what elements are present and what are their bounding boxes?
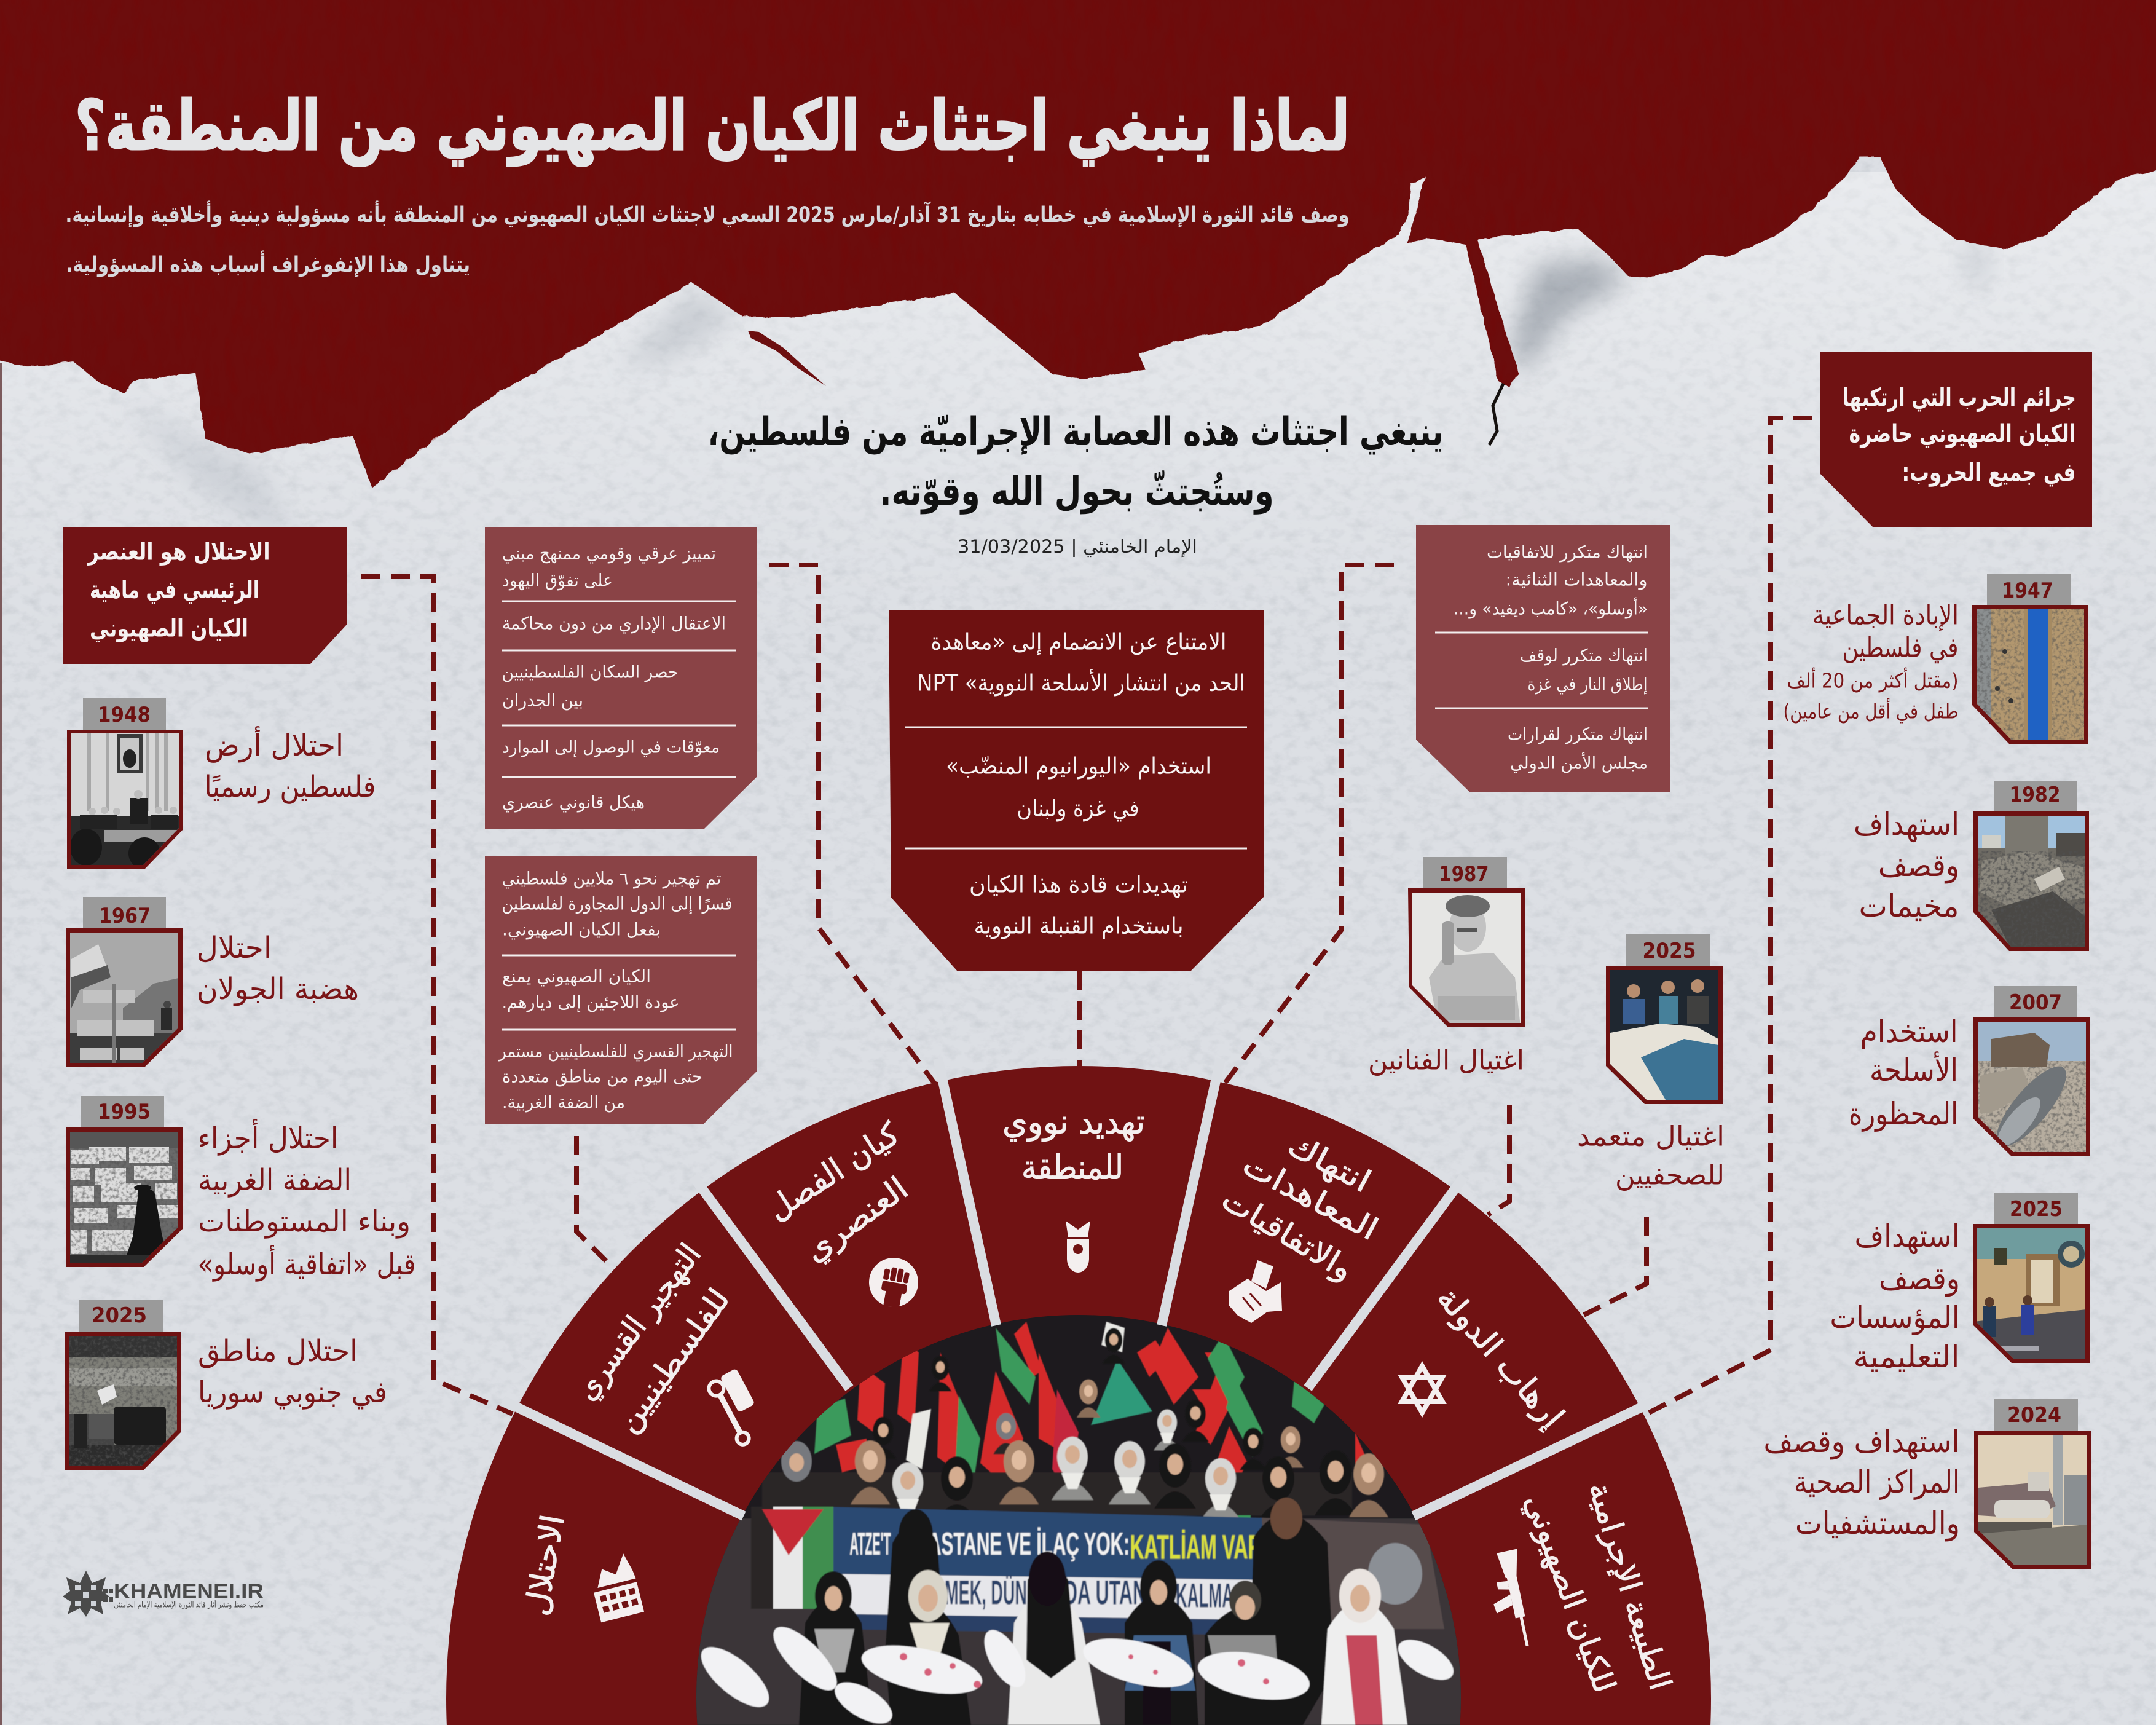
- timeline item 1948: [67, 698, 376, 872]
- torn red header paper: [0, 0, 2156, 492]
- wedge: criminal nature: للكيان الصهيوني: [1517, 1490, 1623, 1698]
- intro text line 2: يتناول هذا الإنفوغراف أسباب هذه المسؤولية.: [66, 250, 470, 277]
- wedge: treaty violations: انتهاك: [1281, 1127, 1377, 1200]
- panel: apartheid entity details: حصر السكان الفلسطينيين: [502, 661, 679, 682]
- wedge: nuclear threat: للمنطقة: [1021, 1148, 1123, 1186]
- white shrouded bundles: [692, 1618, 1460, 1725]
- war crimes item 2025 schools: 2025: [2010, 1197, 2063, 1222]
- war crimes item 1982: مخيمات: [1859, 888, 1959, 924]
- war crimes item 1982: 1982: [2010, 783, 2060, 807]
- war crimes item 2024 hospitals: والمستشفيات: [1795, 1506, 1960, 1542]
- timeline item 1967: [66, 897, 359, 1070]
- war crimes item 2025 schools: [1830, 1193, 2090, 1375]
- photo: protest crowd: [692, 1309, 1463, 1725]
- panel: treaty violations details: انتهاك متكرر لوقف: [1520, 645, 1648, 665]
- panel: treaty violations details: «أوسلو»، «كامب ديفيد» و...: [1454, 596, 1648, 618]
- wedge: forced displacement: للفلسطينيين: [609, 1282, 737, 1439]
- timeline item 1967: 1967: [99, 904, 151, 928]
- intro text line 1: وصف قائد الثورة الإسلامية في خطابه بتاريخ 31 آذار/مارس 2025 السعي لاجتثاث الكيان الصهيوني من المنطقة بأنه مسؤولية دينية وأخلاقية وإنسانية.: [65, 200, 1350, 227]
- panel: treaty violations details: [1416, 525, 1670, 792]
- left header: occupation: [63, 527, 347, 664]
- wedge: occupation: [518, 1512, 644, 1622]
- wedge divider lines: [503, 1059, 1656, 1516]
- wedge: apartheid entity: كيان الفصل: [761, 1116, 906, 1228]
- icon: star of David: [1402, 1366, 1442, 1413]
- war crimes item 1982: وقصف: [1878, 848, 1959, 884]
- panel: nuclear threat details: [889, 610, 1264, 971]
- left header: occupation: الاحتلال هو العنصر: [87, 539, 270, 566]
- war crimes item 2024 hospitals: [1764, 1399, 2091, 1570]
- logo: Khamenei.ir: [63, 1571, 264, 1617]
- war crimes item 1982: استهداف: [1854, 807, 1959, 843]
- wedge: state terrorism: إرهاب الدولة: [1430, 1280, 1571, 1435]
- icon: key and bundle: [706, 1368, 769, 1447]
- panel: nuclear threat details: الامتناع عن الانضمام إلى «معاهدة: [930, 628, 1227, 655]
- Palestinian flag: [751, 1507, 833, 1609]
- panel: forced displacement details: حتى اليوم من مناطق متعددة: [502, 1066, 702, 1087]
- timeline item 1967: هضبة الجولان: [197, 972, 359, 1006]
- panel: apartheid entity details: هيكل قانوني عنصري: [502, 792, 645, 813]
- right header: war crimes: [1820, 352, 2092, 527]
- central quote heading: [708, 409, 1443, 515]
- panel: forced displacement details: بفعل الكيان الصهيوني.: [502, 920, 661, 939]
- icon: occupied buildings: [586, 1552, 644, 1622]
- war crimes item 2007: الأسلحة: [1870, 1051, 1958, 1088]
- left header: occupation: الكيان الصهيوني: [90, 615, 248, 643]
- panel: apartheid entity details: معوّقات في الوصول إلى الموارد: [502, 736, 720, 757]
- timeline item 1948: 1948: [98, 703, 151, 727]
- item 1987 artists: [1368, 857, 1525, 1076]
- logo: Khamenei.ir: مكتب حفظ ونشر آثار قائد الثورة الإسلامية الإمام الخامنئي: [114, 1600, 264, 1609]
- photo: protest crowd: ATZE'T: [849, 1526, 891, 1562]
- panel: treaty violations details: إطلاق النار في غزة: [1528, 674, 1647, 695]
- war crimes item 1947: طفل في أقل من عامين): [1784, 698, 1958, 723]
- panel: apartheid entity details: الاعتقال الإداري من دون محاكمة: [502, 614, 726, 633]
- panel: nuclear threat details: باستخدام القنبلة النووية: [974, 912, 1184, 939]
- timeline item 1995: الضفة الغربية: [198, 1163, 352, 1198]
- wedge: occupation: الاحتلال: [518, 1512, 572, 1618]
- wedge: criminal nature: الطبيعة الإجرامية: [1581, 1478, 1678, 1694]
- wedge: apartheid entity: [761, 1116, 922, 1311]
- war crimes item 2007: [1849, 986, 2091, 1159]
- quote attribution: الإمام الخامنئي | 31/03/2025: [958, 536, 1197, 558]
- icon: torn agreement handshake: [1229, 1260, 1282, 1323]
- right header: war crimes: الكيان الصهيوني حاضرة: [1849, 420, 2076, 448]
- war crimes item 2024 hospitals: استهداف وقصف: [1764, 1424, 1959, 1460]
- panel: apartheid entity details: على تفوّق اليهود: [502, 570, 613, 590]
- panel: forced displacement details: [485, 856, 757, 1124]
- panel: treaty violations details: مجلس الأمن الدولي: [1510, 751, 1648, 773]
- icon: nuclear bomb: [1066, 1221, 1090, 1273]
- timeline item 1995: احتلال أجزاء: [198, 1119, 338, 1156]
- item 2025 journalists: [1577, 934, 1725, 1191]
- right header: war crimes: جرائم الحرب التي ارتكبها: [1843, 384, 2076, 412]
- war crimes item 1947: الإبادة الجماعية: [1812, 600, 1959, 631]
- timeline item 1995: قبل «اتفاقية أوسلو»: [198, 1245, 415, 1282]
- central quote heading: وستُجتثّ بحول الله وقوّته.: [880, 469, 1273, 515]
- panel: treaty violations details: والمعاهدات الثنائية:: [1506, 569, 1647, 590]
- timeline item 2025 south Syria: [65, 1300, 387, 1471]
- connector lines: [361, 418, 1812, 1414]
- item 2025 journalists: 2025: [1642, 939, 1696, 963]
- timeline item 1948: احتلال أرض: [205, 726, 344, 763]
- title: لماذا ينبغي اجتثاث الكيان الصهيوني من المنطقة؟: [75, 86, 1350, 167]
- war crimes item 2024 hospitals: المراكز الصحية: [1794, 1464, 1960, 1500]
- panel: apartheid entity details: [485, 527, 757, 829]
- war crimes item 2007: المحظورة: [1849, 1096, 1958, 1132]
- war crimes item 1982: [1854, 781, 2091, 953]
- wedge: nuclear threat: تهديد نووي: [1002, 1103, 1145, 1141]
- semicircular fan of seven causes: [446, 1059, 1711, 1725]
- left header: occupation: الرئيسي في ماهية: [90, 577, 259, 604]
- icon: raised fist: [865, 1254, 922, 1311]
- panel: treaty violations details: انتهاك متكرر للاتفاقيات: [1487, 542, 1648, 562]
- photo: protest crowd: MEK, DÜN: [945, 1573, 1027, 1612]
- photo: protest crowd: KATLİAM VAR: [1130, 1527, 1262, 1566]
- right header: war crimes: في جميع الحروب:: [1902, 459, 2076, 487]
- panel: nuclear threat details: استخدام «اليورانيوم المنضّب»: [946, 752, 1211, 780]
- icon: rifle: [1484, 1549, 1537, 1651]
- war crimes item 1947: (مقتل أكثر من 20 ألف: [1787, 668, 1958, 692]
- wedge: treaty violations: والاتفاقيات: [1215, 1182, 1359, 1288]
- item 1987 artists: 1987: [1439, 862, 1489, 886]
- item 2025 journalists: اغتيال متعمد: [1577, 1121, 1725, 1152]
- war crimes item 2025 schools: المؤسسات: [1830, 1300, 1959, 1335]
- panel: apartheid entity details: تمييز عرقي وقومي ممنهج مبني: [502, 543, 716, 563]
- timeline item 2025 south Syria: احتلال مناطق: [198, 1334, 358, 1368]
- wedge: treaty violations: المعاهدات: [1237, 1147, 1384, 1247]
- war crimes item 2007: 2007: [2009, 990, 2062, 1015]
- logo: Khamenei.ir: KHAMENEI.IR: [114, 1580, 264, 1602]
- panel: treaty violations details: انتهاك متكرر لقرارات: [1508, 724, 1648, 744]
- timeline item 1967: احتلال: [197, 931, 272, 965]
- item 1987 artists: اغتيال الفنانين: [1368, 1045, 1524, 1076]
- banner: [824, 1507, 1266, 1580]
- panel: nuclear threat details: الحد من انتشار الأسلحة النووية» NPT: [917, 669, 1245, 696]
- timeline item 1995: وبناء المستوطنات: [198, 1204, 411, 1239]
- photo: protest crowd: KALMA: [1176, 1576, 1233, 1614]
- war crimes item 2024 hospitals: 2024: [2007, 1403, 2061, 1427]
- panel: nuclear threat details: في غزة ولبنان: [1017, 795, 1139, 821]
- wedge: nuclear threat: [1002, 1103, 1145, 1273]
- photo: protest crowd: DA UTAN: [1064, 1573, 1146, 1612]
- war crimes item 2007: استخدام: [1860, 1014, 1958, 1049]
- timeline item 1995: 1995: [98, 1100, 151, 1124]
- wedge: forced displacement: [568, 1237, 769, 1447]
- panel: forced displacement details: الكيان الصهيوني يمنع: [502, 966, 651, 986]
- item 2025 journalists: للصحفيين: [1615, 1159, 1725, 1191]
- panel: apartheid entity details: بين الجدران: [502, 690, 583, 711]
- panel: forced displacement details: التهجير القسري للفلسطينيين مستمر: [498, 1041, 733, 1061]
- wedge: criminal nature: [1484, 1478, 1678, 1698]
- war crimes item 1947: 1947: [2002, 578, 2053, 603]
- timeline item 2025 south Syria: 2025: [92, 1303, 147, 1328]
- war crimes item 2025 schools: التعليمية: [1854, 1339, 1959, 1375]
- wedge: forced displacement: التهجير القسري: [568, 1237, 709, 1407]
- war crimes item 1947: [1784, 574, 2090, 744]
- front figures: [799, 1514, 1334, 1725]
- panel: forced displacement details: من الضفة الغربية.: [502, 1092, 625, 1113]
- war crimes item 2025 schools: استهداف: [1855, 1218, 1959, 1255]
- wedge: treaty violations: [1215, 1127, 1384, 1323]
- timeline item 1948: فلسطين رسميًا: [204, 770, 376, 804]
- panel: forced displacement details: تم تهجير نحو ٦ ملايين فلسطيني: [502, 868, 722, 889]
- war crimes item 1947: في فلسطين: [1843, 632, 1958, 664]
- panel: forced displacement details: عودة اللاجئين إلى ديارهم.: [502, 992, 680, 1012]
- panel: nuclear threat details: تهديدات قادة هذا الكيان: [969, 872, 1188, 898]
- panel: forced displacement details: قسرًا إلى الدول المجاورة لفلسطين: [502, 894, 733, 914]
- war crimes item 2025 schools: وقصف: [1879, 1261, 1960, 1297]
- timeline item 1995: [66, 1096, 415, 1282]
- wedge: apartheid entity: العنصري: [797, 1170, 915, 1269]
- photo: protest crowd: ASTANE VE İLAÇ YOK:: [928, 1526, 1130, 1562]
- timeline item 2025 south Syria: في جنوبي سوريا: [198, 1375, 387, 1410]
- central quote heading: ينبغي اجتثاث هذه العصابة الإجراميّة من فلسطين،: [708, 409, 1443, 455]
